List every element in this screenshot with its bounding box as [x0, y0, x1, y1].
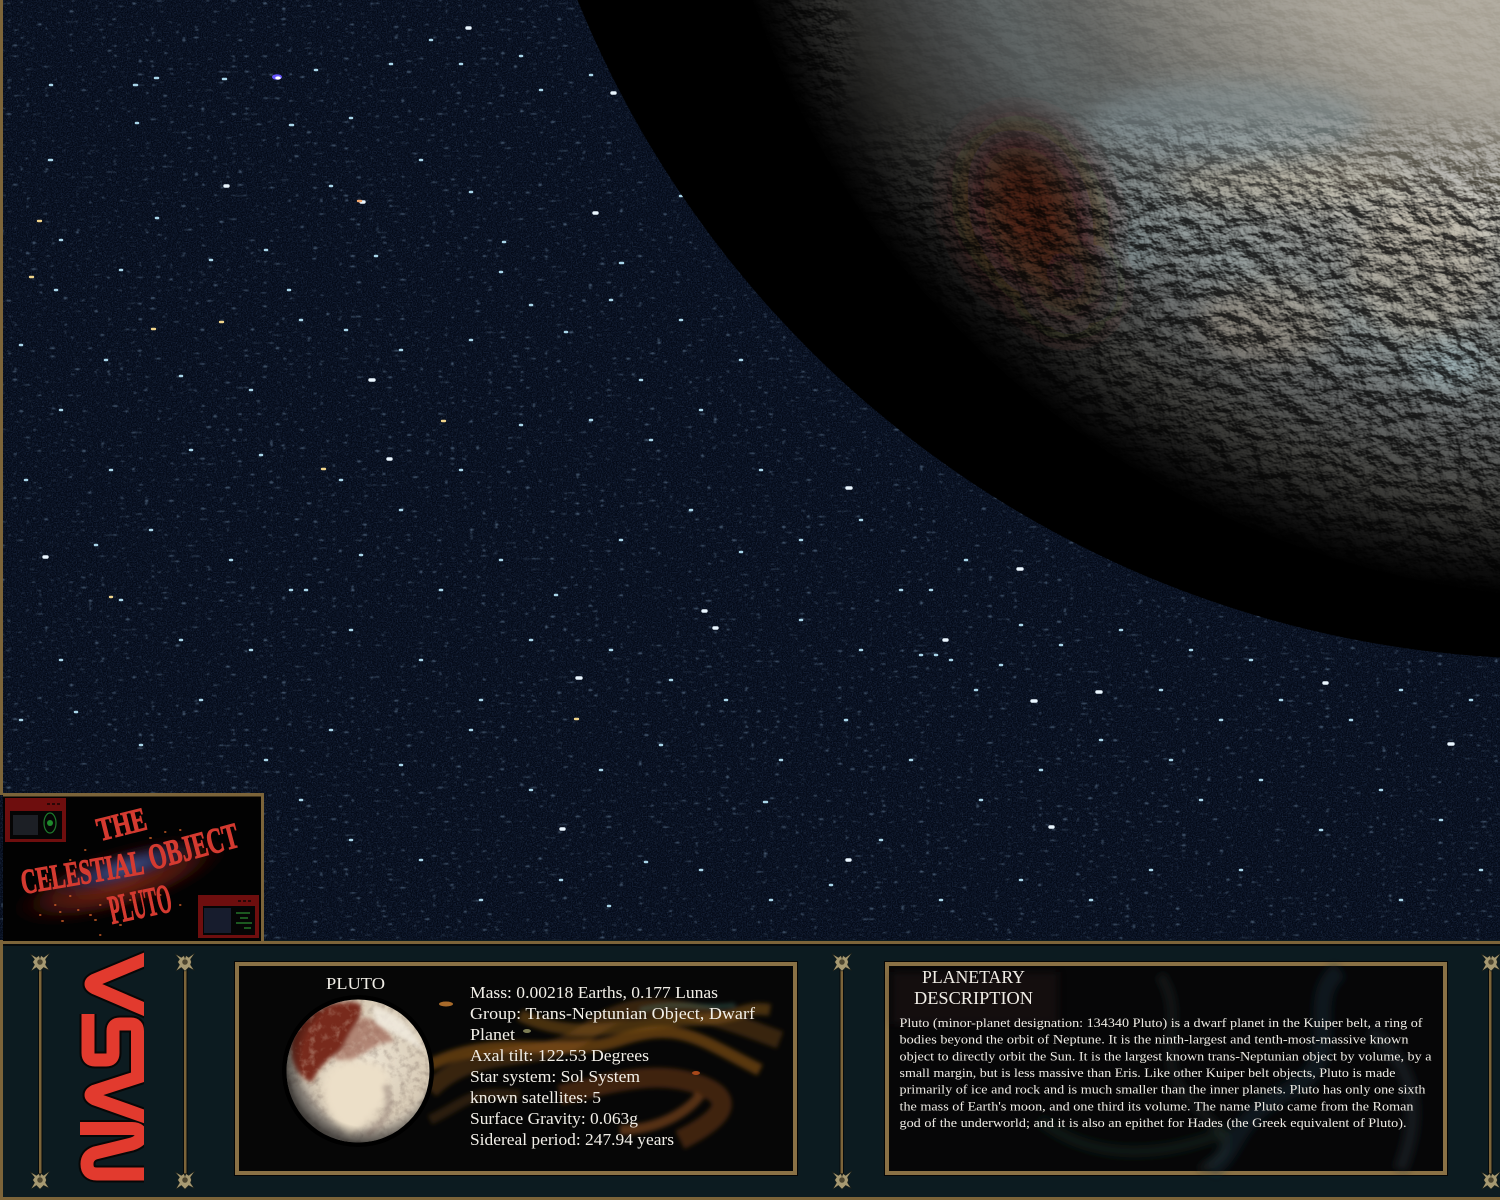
description paragraph: [900, 1015, 1432, 1130]
description paragraph: bodies beyond the orbit of Neptune. It is the ninth-largest and tenth-most-massive known: [900, 1032, 1409, 1047]
planet statistics: Planet: [470, 1025, 515, 1044]
description paragraph: god of the underworld; and it is also an epithet for Hades (the Greek equivalent of Pluto).: [900, 1115, 1406, 1130]
nebula swirls: [1040, 970, 1412, 1170]
planet statistics: known satellites: 5: [470, 1088, 601, 1107]
small window: data readout: [198, 895, 259, 938]
planet statistics: Sidereal period: 247.94 years: [470, 1130, 674, 1149]
description paragraph: Pluto (minor-planet designation: 134340 Pluto) is a dwarf planet in the Kuiper belt, a ring of: [900, 1015, 1423, 1030]
ornamental column dividers: [30, 953, 1500, 1189]
planet statistics: Surface Gravity: 0.063g: [470, 1109, 639, 1128]
planet surface close-up: [578, 0, 1500, 658]
planet statistics: [470, 983, 755, 1149]
panel heading: planetary description: [914, 967, 1033, 1008]
panel: planetary description: [884, 961, 1448, 1176]
panel heading: PLUTO: PLUTO: [326, 974, 385, 993]
planet statistics: Group: Trans-Neptunian Object, Dwarf: [470, 1004, 755, 1023]
panel: planet facts: [234, 961, 798, 1176]
planet statistics: Mass: 0.00218 Earths, 0.177 Lunas: [470, 983, 718, 1002]
planet statistics: Star system: Sol System: [470, 1067, 640, 1086]
planet statistics: Axal tilt: 122.53 Degrees: [470, 1046, 649, 1065]
main title: THE: [93, 802, 150, 849]
main title: OBJECT: [144, 815, 243, 878]
main title: [18, 802, 243, 933]
small window: orbit diagram: [5, 798, 66, 842]
description paragraph: primarily of ice and rock and is much smaller than the inner planets. Pluto has only one sixth: [900, 1082, 1426, 1097]
rust coloured region: [945, 110, 1115, 325]
starfield background: [0, 0, 1500, 945]
description paragraph: small margin, but is less massive than Eris. Like other Kuiper belt objects, Pluto is made: [900, 1065, 1396, 1080]
NASA worm logo: [78, 950, 144, 1182]
galaxy backdrop: [1, 816, 239, 944]
planet globe image: [282, 995, 434, 1147]
title plate: [1, 793, 264, 944]
flowing orange waves: [430, 1005, 780, 1140]
panel heading: planetary description: DESCRIPTION: [914, 988, 1033, 1008]
smooth blue ice plains: [1090, 80, 1485, 387]
panel heading: planetary description: PLANETARY: [922, 967, 1025, 987]
light ridged highlands: [1170, 156, 1490, 360]
description paragraph: the mass of Earth's moon, and one third its volume. The name Pluto came from the Roman: [900, 1098, 1414, 1113]
description paragraph: object to directly orbit the Sun. It is the largest known trans-Neptunian object by volume, by a: [900, 1048, 1432, 1063]
main title: PLUTO: [104, 875, 175, 933]
relief texture: [786, 0, 1500, 562]
main title: CELESTIAL: [18, 843, 147, 902]
